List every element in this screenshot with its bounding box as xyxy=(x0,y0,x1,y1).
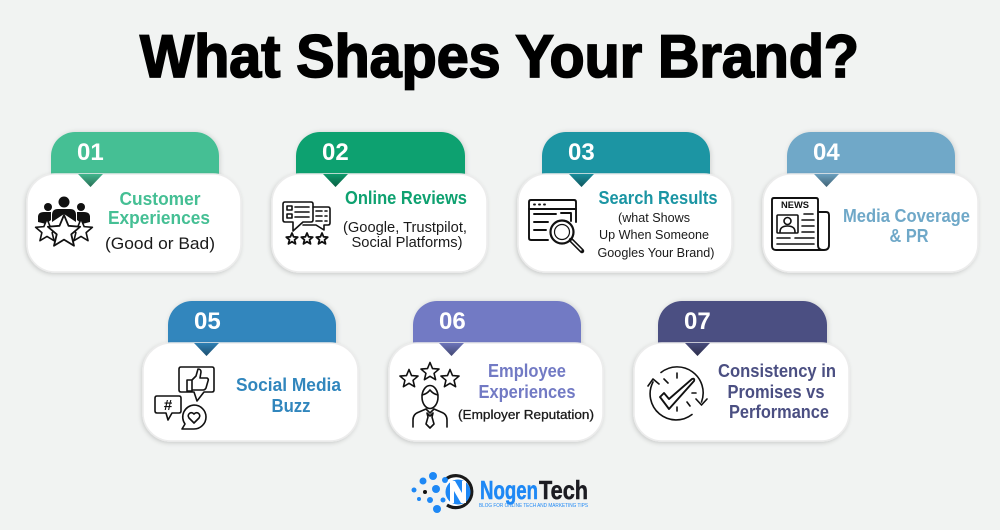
number 06: 06 xyxy=(439,308,466,335)
panel: 06 employee experiences xyxy=(389,301,603,441)
logo wordmark: Nogen xyxy=(480,475,538,505)
text: media coverage: & PR xyxy=(890,226,928,246)
panel: 03 search results xyxy=(518,132,732,272)
card 05 xyxy=(143,343,358,441)
number tab 04 xyxy=(787,132,955,200)
number tab 02 xyxy=(296,132,465,200)
panel: 04 media coverage xyxy=(763,132,978,272)
pointer 02 xyxy=(323,174,348,187)
text: customer experiences: (Good or Bad) xyxy=(105,234,215,253)
text: online reviews: Social Platforms) xyxy=(352,234,462,251)
number tab 01 xyxy=(51,132,219,200)
text: consistency in promises: Promises vs xyxy=(728,382,824,402)
panel: 05 social media buzz xyxy=(143,301,358,441)
text: customer experiences xyxy=(105,189,215,253)
icon: customers and stars xyxy=(36,196,92,246)
card 07 xyxy=(634,343,849,441)
icon: social bubbles: # xyxy=(164,397,173,414)
text: search results: Googles Your Brand) xyxy=(598,245,714,260)
panel: 01 customer experiences xyxy=(27,132,241,272)
text: consistency in promises: Performance xyxy=(729,402,829,422)
pointer 03 xyxy=(569,174,594,187)
number tab 03 xyxy=(542,132,710,200)
text: customer experiences: Experiences xyxy=(108,208,210,228)
number tab 06 xyxy=(413,301,581,369)
text: online reviews: Online Reviews xyxy=(345,188,467,208)
number 03: 03 xyxy=(568,139,595,166)
text: search results xyxy=(598,188,718,260)
icon: employee with stars xyxy=(400,362,459,428)
text: consistency in promises xyxy=(718,361,836,422)
icon: newspaper: NEWS xyxy=(781,200,809,211)
text: search results: (what Shows xyxy=(618,210,690,225)
icon: clock with check xyxy=(648,367,707,420)
title: What Shapes Your Brand? xyxy=(140,23,859,90)
card 02 xyxy=(272,174,487,272)
number 04: 04 xyxy=(813,139,840,166)
text: online reviews: (Google, Trustpilot, xyxy=(343,219,467,236)
text: social media buzz: Buzz xyxy=(272,396,310,416)
text: customer experiences: Customer xyxy=(120,189,200,209)
logo: NogenTech xyxy=(412,472,588,513)
icon: review bubbles xyxy=(283,202,330,244)
icon: social bubbles xyxy=(155,367,214,429)
pointer 04 xyxy=(814,174,839,187)
text: employee experiences: Experiences xyxy=(478,382,576,402)
card 01 xyxy=(27,174,241,272)
logo mark xyxy=(412,472,472,513)
icon: search window xyxy=(529,200,582,251)
pointer 01 xyxy=(78,174,103,187)
logo wordmark tech: Tech xyxy=(539,475,588,505)
number 05: 05 xyxy=(194,308,221,335)
card 03 xyxy=(518,174,732,272)
text: media coverage: Media Coverage xyxy=(843,206,970,226)
number 07: 07 xyxy=(684,308,711,335)
card 06 xyxy=(389,343,603,441)
panel: 02 online reviews xyxy=(272,132,487,272)
pointer 06 xyxy=(439,343,464,356)
logo tagline: BLOG FOR ONLINE TECH AND MARKETING TIPS xyxy=(479,503,588,509)
text: search results: Up When Someone xyxy=(599,227,709,242)
text: employee experiences: Employee xyxy=(488,361,566,381)
text: social media buzz xyxy=(236,375,342,416)
number tab 07 xyxy=(658,301,827,369)
text: search results: Search Results xyxy=(598,188,718,208)
text: consistency in promises: Consistency in xyxy=(718,361,836,381)
pointer 07 xyxy=(685,343,710,356)
number 02: 02 xyxy=(322,139,349,166)
text: online reviews xyxy=(343,188,467,251)
icon: newspaper xyxy=(772,198,829,250)
text: media coverage xyxy=(843,206,970,246)
card 04 xyxy=(763,174,978,272)
pointer 05 xyxy=(194,343,219,356)
number tab 05 xyxy=(168,301,336,369)
text: employee experiences: (Employer Reputation) xyxy=(458,407,594,422)
number 01: 01 xyxy=(77,139,104,166)
text: social media buzz: Social Media xyxy=(236,375,342,395)
panel: 07 consistency xyxy=(634,301,849,441)
text: employee experiences xyxy=(458,361,594,422)
